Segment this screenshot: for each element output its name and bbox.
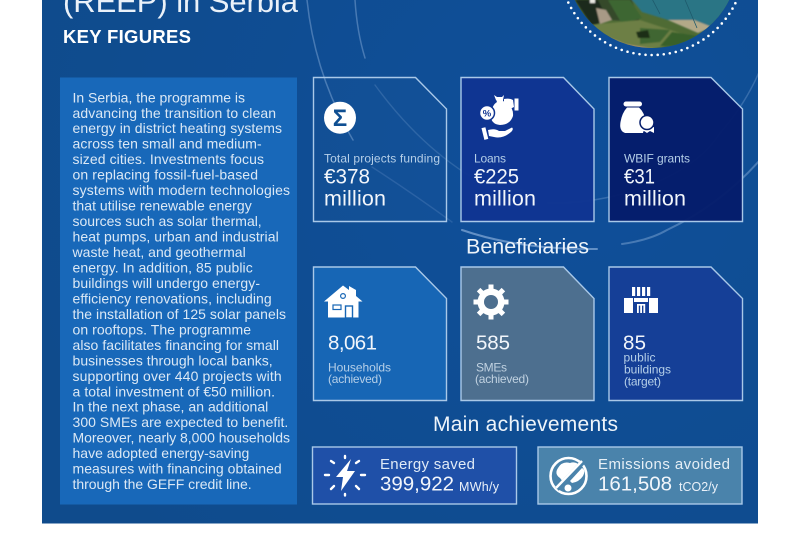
label: WBIF grants: WBIF grants [624,152,690,166]
value: 225 million [474,164,536,210]
card: SMEs [461,267,594,400]
value: SMEs: 585 [476,332,510,354]
text block: programme description: energy in district heating systems [72,120,282,136]
label: SMEs achieved: SMEs [476,360,507,374]
photo circle with dotted ring [567,0,737,56]
label: public buildings target: buildings [624,362,671,376]
text block: programme description: also facilitates financing for small [72,337,279,353]
icon: gear [474,284,508,320]
text block: programme description: energy. In addition, 85 public [72,260,253,276]
label: emissions avoided: Emissions avoided [598,456,730,473]
text block: programme description: Moreover, nearly 8,000 households [72,430,290,446]
heading: main achievements: Main achievements [433,413,618,436]
card: public buildings [609,267,742,400]
value: 378 million [324,164,386,210]
text block: programme description: supporting over 440 projects with [72,368,282,384]
text block: programme description: through the GEFF credit line. [72,476,252,492]
value: public buildings: 85 [623,332,646,354]
label: total projects funding: Total projects funding [324,152,440,166]
label: households achieved [328,360,391,386]
value: 225 million: million [474,186,536,210]
panel: programme description [60,78,297,504]
text block: programme description: have adopted energy-saving [72,445,249,461]
text block: programme description: that utilise renewable energy [72,198,252,214]
label: public buildings target [624,351,671,389]
unit: tCO2 per year: tCO2/y [679,480,719,494]
text block: programme description [72,89,290,492]
icon: no emissions cloud [550,458,586,494]
label: SMEs achieved: (achieved) [475,372,529,386]
text block: programme description: measures with financing obtained [72,461,282,477]
text block: programme description: systems with modern technologies [72,182,290,198]
unit: MWh per year: MWh/y [459,480,500,494]
icon: loan money bag and hand: % [483,108,492,120]
value: 225 million: €225 [474,164,519,188]
text block: programme description: 300 SMEs are expected to benefit. [72,414,288,430]
card: WBIF grants [609,78,742,222]
icon: lightning bolt with rays [325,456,365,496]
label: public buildings target: public [624,351,656,365]
dotted ring [559,0,745,55]
card: households [314,267,446,400]
value: households: 8,061 [328,332,377,354]
text block: programme description: a total investment of €50 million. [72,383,275,399]
value: 31 million: €31 [624,164,655,188]
callout: emissions avoided [538,447,742,504]
card: loans [461,78,594,222]
text block: programme description: sized cities. Investments focus [72,151,264,167]
text block: programme description: sources such as solar thermal, [72,213,262,229]
icon: sigma [324,102,356,134]
value: emissions avoided: 161,508 [598,473,672,496]
text block: programme description: the installation of 125 solar panels [72,306,286,322]
label: energy saved: Energy saved [380,456,475,473]
card: total projects funding [314,78,446,222]
text block: programme description: waste heat, and geothermal [72,244,246,260]
label: public buildings target: (target) [624,375,661,389]
text block: programme description: In the next phase, an additional [72,399,268,415]
callout: energy saved [312,447,516,504]
value: energy saved: 399,922 [380,473,454,496]
value: 378 million: million [324,186,386,210]
icon: sigma: Σ [333,105,347,132]
text block: programme description: on replacing fossil-fuel-based [72,167,258,183]
icon: loan money bag and hand [480,95,518,140]
value: 31 million [624,164,686,210]
text block: programme description: buildings will undergo energy- [72,275,260,291]
icon: house [324,286,362,318]
value: 378 million: €378 [324,164,370,188]
text block: programme description: In Serbia, the programme is [72,89,245,105]
text block: programme description: businesses through local banks, [72,352,273,368]
heading: key figures: KEY FIGURES [63,26,191,47]
label: households achieved: (achieved) [328,372,382,386]
value: 31 million: million [624,186,686,210]
text block: programme description: heat pumps, urban and industrial [72,228,279,244]
heading: beneficiaries: Beneficiaries [466,234,589,258]
text block: programme description: on rooftops. The programme [72,321,251,337]
icon: public building [624,287,658,313]
label: households achieved: Households [328,360,391,374]
label: SMEs achieved [475,360,529,386]
text block: programme description: advancing the transition to clean [72,105,276,121]
label: loans: Loans [474,152,506,166]
text block: programme description: across ten small and medium- [72,136,262,152]
text block: programme description: efficiency renovations, including [72,290,272,306]
photo: solar field [574,0,730,48]
icon: grant bag with rosette [620,102,654,133]
